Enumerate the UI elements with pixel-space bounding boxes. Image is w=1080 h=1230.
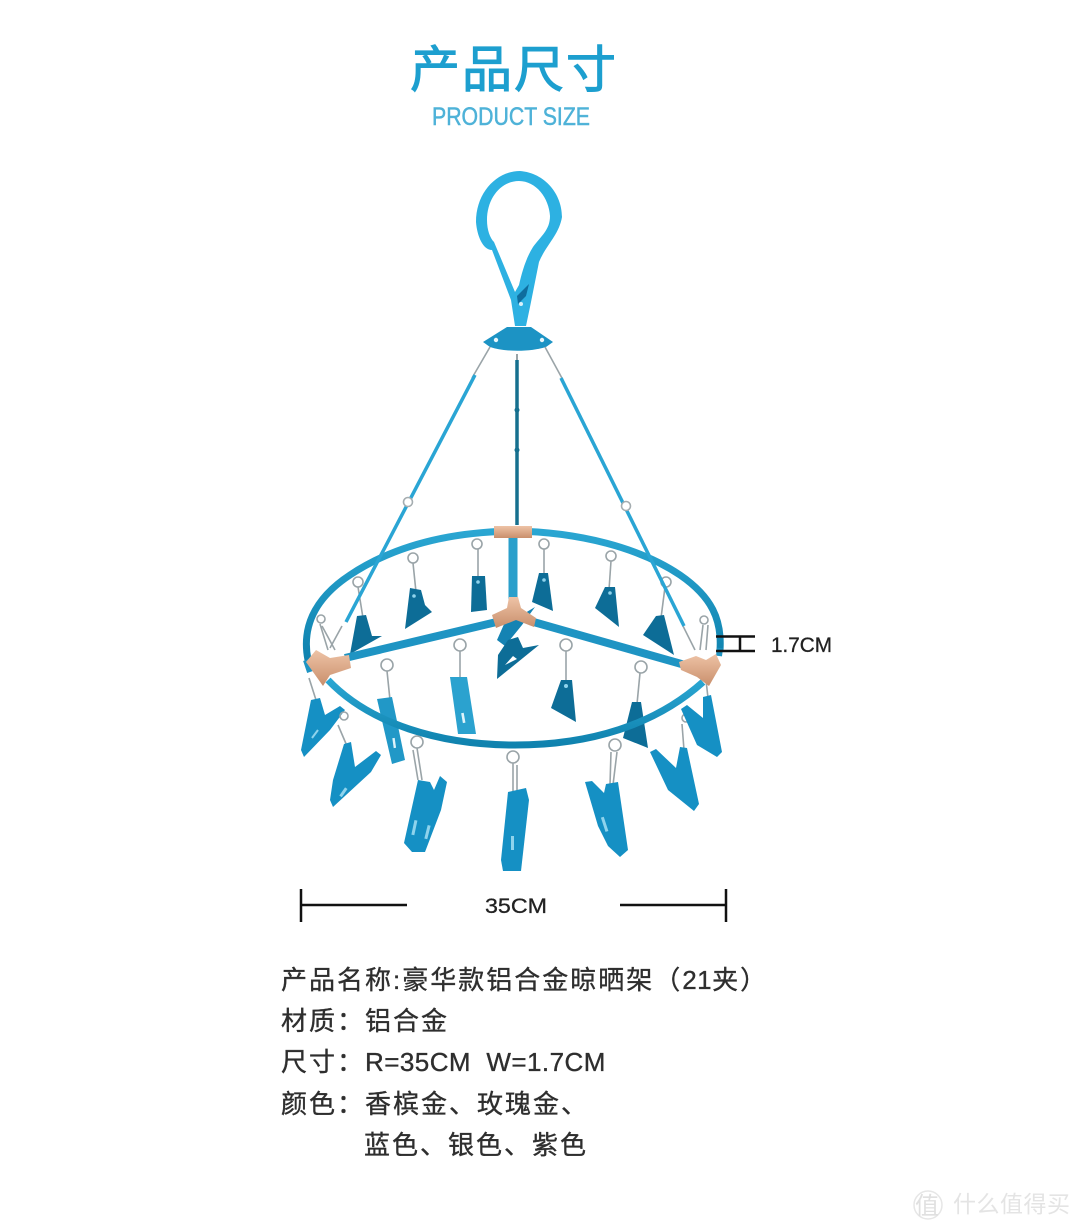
side wires right (683, 616, 708, 650)
product name: 产品名称:豪华款铝合金晾晒架（21夹） (281, 965, 768, 995)
watermark: 什么值得买 (953, 1191, 1070, 1217)
front ring (328, 680, 703, 745)
back spoke (508, 536, 518, 602)
colours: 颜色：香槟金、玫瑰金、 (281, 1089, 589, 1119)
dimension: diameter 35CM (301, 889, 726, 922)
hanger cap (483, 327, 553, 351)
back clip 5 (643, 577, 674, 655)
ring ends at sides (306, 648, 720, 672)
side wires left (317, 615, 342, 650)
front right clip 18 (681, 680, 722, 757)
back clip 1 (405, 553, 432, 629)
middle clip 10 (377, 659, 405, 764)
middle clip 8 (450, 639, 476, 734)
back ring (306, 531, 720, 660)
front clip 17 (650, 714, 699, 811)
centre rod (514, 354, 520, 525)
arm left (346, 347, 490, 622)
hub clip (497, 637, 539, 679)
back clip 4 (595, 551, 619, 627)
material: 材质：铝合金 (281, 1006, 449, 1036)
colours line 2: 蓝色、银色、紫色 (364, 1130, 588, 1160)
copper connector left (306, 650, 351, 686)
front clip 14 (404, 736, 447, 852)
product specifications (281, 965, 768, 1160)
dimension: thickness 1.7CM (716, 634, 832, 657)
watermark: 值 (915, 1193, 939, 1220)
back clip 6 (350, 577, 382, 654)
front left clip 12 (301, 678, 345, 757)
title: 产品尺寸 (410, 42, 618, 98)
front clip 13 (330, 712, 381, 807)
side spokes (345, 620, 685, 665)
watermark (914, 1191, 1070, 1220)
front clip 15 (501, 751, 529, 871)
hook (476, 171, 562, 326)
copper connector right (679, 654, 721, 686)
front clip 16 (585, 739, 628, 857)
rear hub clip (497, 607, 535, 646)
dimension: thickness 1.7CM: 1.7CM (771, 634, 832, 657)
dimension: diameter 35CM: 35CM (485, 895, 547, 918)
back clip 3 (532, 539, 553, 611)
subtitle: PRODUCT SIZE (432, 103, 590, 131)
middle clip 11 (623, 661, 648, 748)
back clip 2 (471, 539, 487, 612)
size: 尺寸：R=35CM W=1.7CM (281, 1047, 606, 1077)
middle clip 9 (551, 639, 576, 722)
copper connector back (494, 526, 532, 538)
drying rack illustration (301, 171, 722, 871)
arm right (545, 347, 684, 626)
title (410, 42, 618, 131)
copper connector hub (492, 597, 536, 628)
